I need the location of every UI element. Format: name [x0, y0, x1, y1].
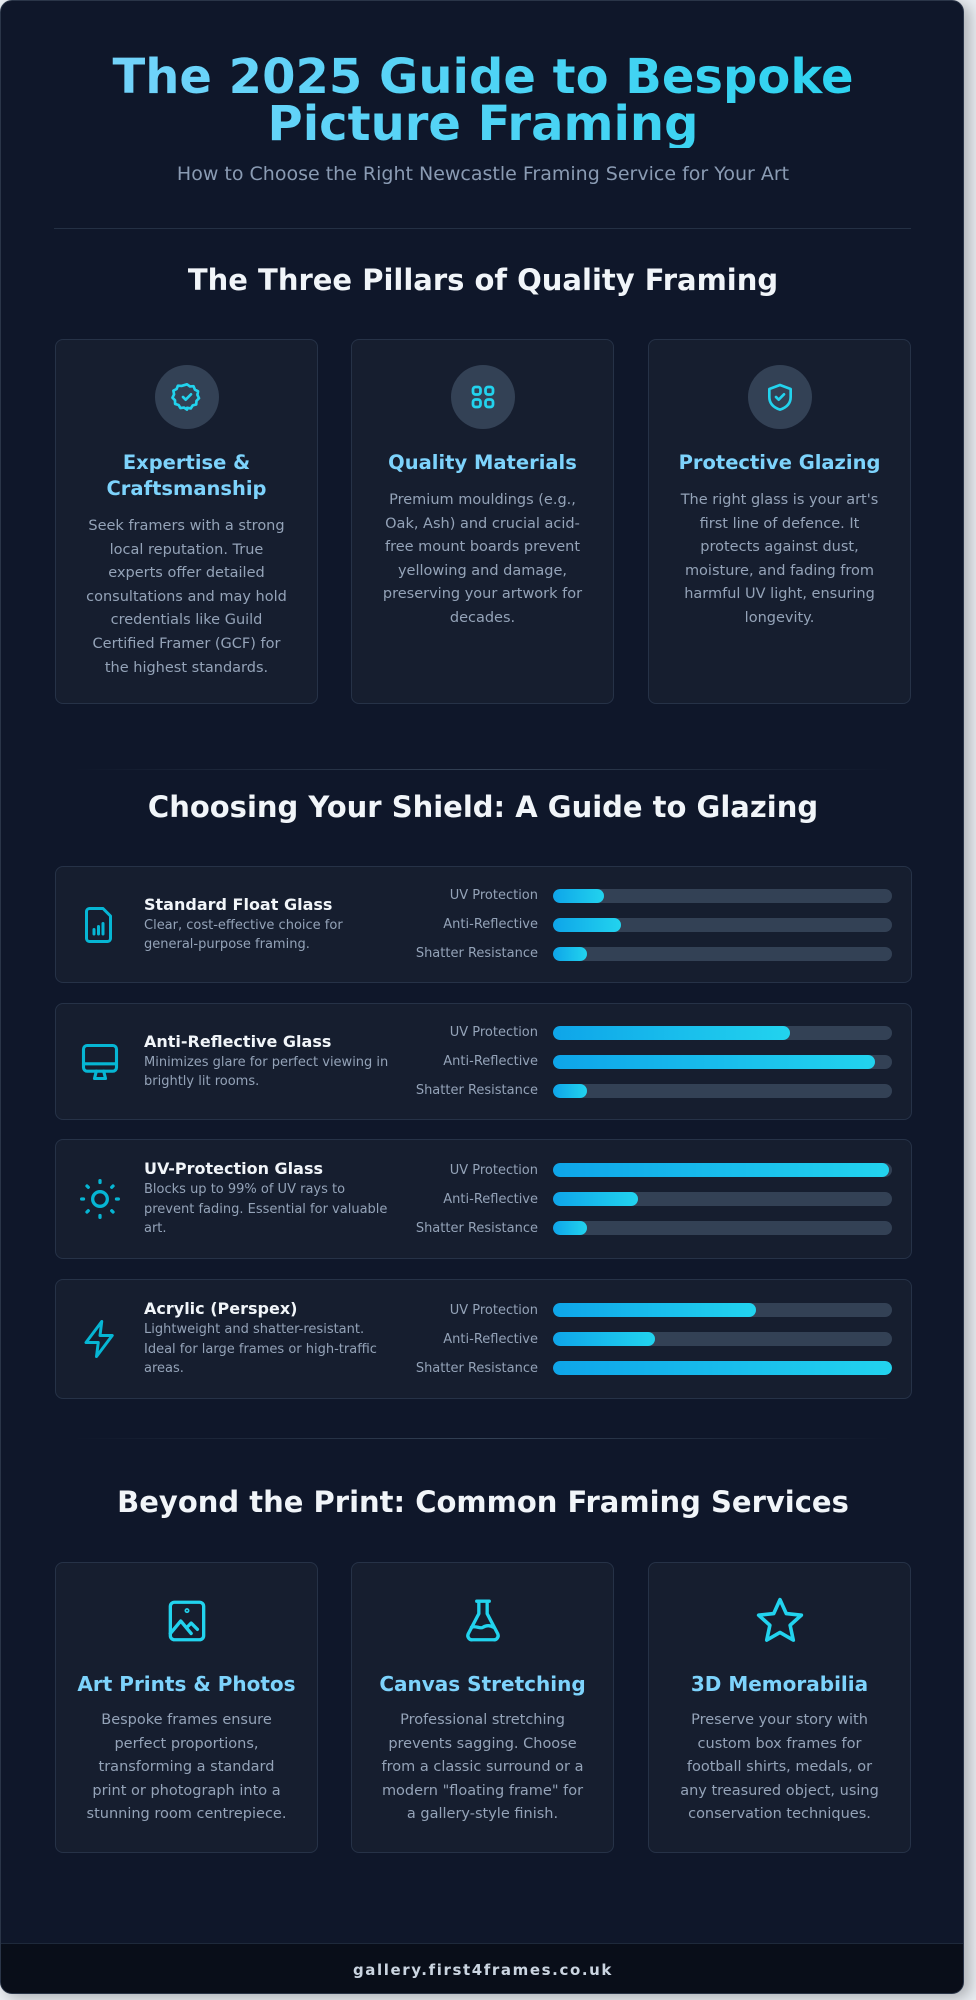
panel: canvas stretching: [351, 1562, 614, 1853]
bar chart: Anti-Reflective: [443, 1332, 538, 1346]
icon: grid: [450, 365, 514, 429]
icon: shield: [748, 365, 812, 429]
title: The 2025 Guide to Bespoke: [112, 49, 854, 105]
icon: badge check: [154, 365, 218, 429]
icon: flask: [466, 1600, 500, 1642]
bar chart: Shatter Resistance: [416, 1083, 538, 1098]
bar chart: Shatter Resistance: [416, 1360, 538, 1376]
text: 3D Memorabilia: [691, 1672, 868, 1696]
panel: art prints: [55, 1562, 318, 1853]
icon: monitor: [82, 1044, 118, 1080]
text: Art Prints & Photos: [77, 1672, 296, 1696]
text: Standard Float Glass: [144, 894, 332, 914]
text: Blocks up to 99% of UV rays to prevent fading. Essential for valuable art.: [144, 1182, 387, 1236]
panel: 3d memorabilia: [648, 1562, 911, 1853]
title: Picture Framing: [268, 96, 698, 152]
text: [144, 1032, 388, 1089]
icon: image: [168, 1600, 206, 1642]
subtitle: How to Choose the Right Newcastle Framing Service for Your Art: [177, 163, 789, 185]
text: glazing: The right glass is your art's first line of defence. It protects against dust, moisture, and fading from harmful UV light, ensuring longevity.: [681, 492, 878, 626]
heading: three pillars: The Three Pillars of Quality Framing: [188, 263, 778, 297]
icon: bolt: [84, 1320, 114, 1358]
bar chart: [416, 888, 892, 961]
text: materials: Quality Materials: [388, 451, 577, 474]
panel: materials: [351, 339, 614, 704]
text: glazing: Protective Glazing: [679, 451, 880, 474]
bar chart: UV Protection: [450, 1025, 538, 1040]
text: [77, 1672, 296, 1822]
footer: [1, 1943, 965, 1995]
icon: file chart: [85, 907, 112, 943]
bar chart: UV Protection: [450, 1302, 538, 1318]
text: Canvas Stretching: [379, 1672, 586, 1696]
heading: services: Beyond the Print: Common Framing Services: [117, 1485, 849, 1519]
panel: expertise: [55, 339, 318, 704]
panel: acrylic: [55, 1279, 912, 1399]
text: Minimizes glare for perfect viewing in brightly lit rooms.: [144, 1054, 388, 1089]
bar chart: Anti-Reflective: [443, 1054, 538, 1069]
text: Preserve your story with custom box frames for football shirts, medals, or any treasured object, using conservation techniques.: [680, 1712, 879, 1822]
bar chart: UV Protection: [450, 1162, 538, 1178]
text: [144, 894, 343, 952]
text: Lightweight and shatter-resistant. Ideal for large frames or high-traffic areas.: [144, 1322, 377, 1376]
text: expertise: Expertise &: [123, 451, 250, 474]
bar chart: [416, 1025, 892, 1098]
text: expertise: Craftsmanship: [106, 477, 266, 500]
text: Acrylic (Perspex): [144, 1299, 297, 1318]
icon: star: [756, 1598, 804, 1642]
text: UV-Protection Glass: [144, 1159, 323, 1178]
text: materials: Premium mouldings (e.g., Oak, Ash) and crucial acid-free mount boards prevent yellowing and damage, preserving your artwork for decades.: [383, 492, 582, 626]
text: Anti-Reflective Glass: [144, 1032, 331, 1050]
bar chart: Anti-Reflective: [443, 1192, 538, 1206]
bar chart: [416, 1162, 892, 1236]
title: [1, 54, 965, 148]
footer: gallery.first4frames.co.uk: [353, 1961, 613, 1979]
panel: uv-protection glass: [55, 1139, 912, 1259]
text: expertise: Seek framers with a strong local reputation. True experts offer detailed consultations and may hold credentials like Guild Certified Framer (GCF) for the highest standards.: [86, 518, 287, 676]
icon: sun: [80, 1179, 120, 1219]
bar chart: UV Protection: [450, 888, 538, 903]
panel: glazing: [648, 339, 911, 704]
bar chart: Anti-Reflective: [443, 917, 538, 932]
heading: glazing guide: Choosing Your Shield: A Guide to Glazing: [148, 790, 818, 824]
text: Clear, cost-effective choice for general-purpose framing.: [144, 918, 343, 952]
bar chart: Shatter Resistance: [416, 1220, 538, 1236]
panel: anti-reflective glass: [55, 1003, 912, 1120]
bar chart: [416, 1302, 892, 1376]
panel: standard float glass: [55, 866, 912, 983]
text: Bespoke frames ensure perfect proportions, transforming a standard print or photograph into a stunning room centrepiece.: [87, 1712, 286, 1822]
bar chart: Shatter Resistance: [416, 946, 538, 961]
text: Professional stretching prevents sagging. Choose from a classic surround or a modern "floating frame" for a gallery-style finish.: [382, 1712, 583, 1822]
